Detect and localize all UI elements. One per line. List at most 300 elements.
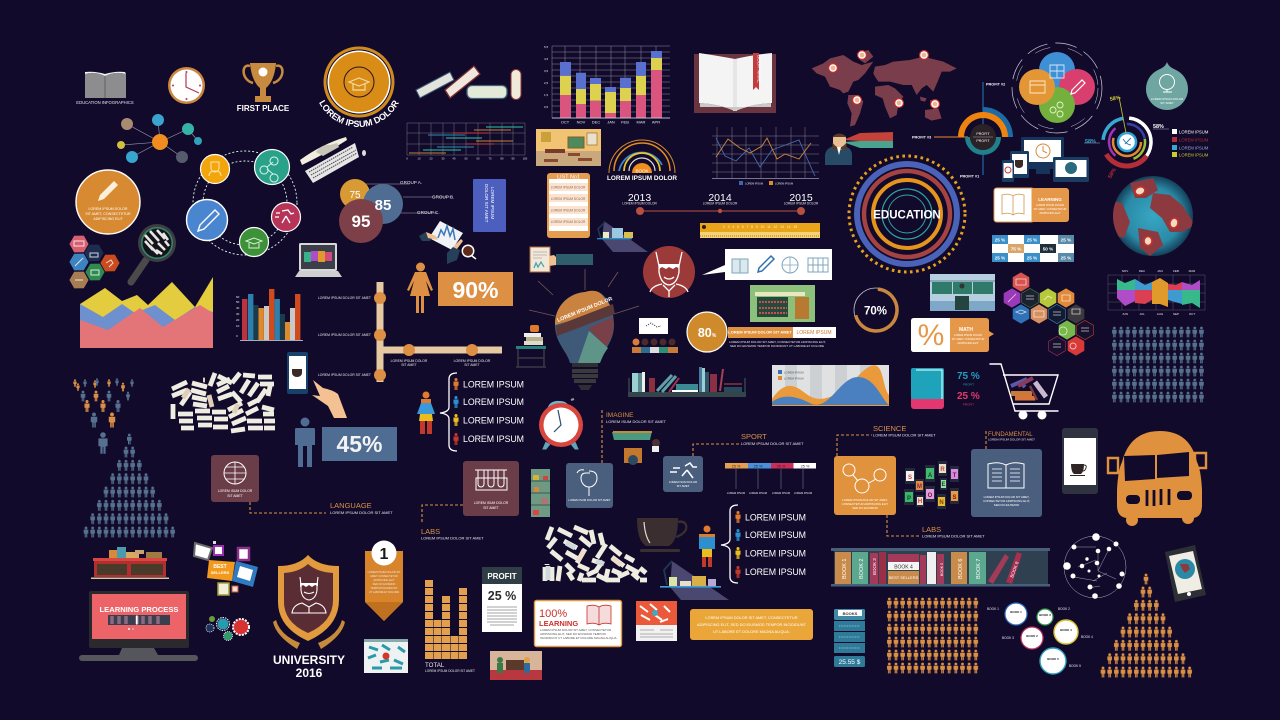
globe with pins	[1110, 176, 1195, 256]
large bookshelf: BOOK 1	[842, 559, 848, 579]
numbered banner: 1	[380, 546, 389, 563]
woman with colored bands and list one: LOREM IPSUM	[463, 397, 524, 407]
icon: students with presentation board	[632, 318, 678, 353]
stat: 80 percent circle with bar: LOREM IPSUM	[796, 330, 832, 336]
numbered banner: LOREM IPSUM DOLOR SIT	[368, 570, 401, 574]
icon: large open book: BOOK NAME	[756, 55, 762, 83]
large bookshelf: BOOK 5	[940, 563, 944, 576]
icon: grey open book with caption	[76, 72, 134, 105]
percent stacked bar: LOREM IPSUM	[794, 491, 812, 495]
100 percent learning card: 100%	[539, 608, 567, 620]
stat: 80 percent circle with bar: LOREM IPSUM DOLOR SIT AMET	[728, 330, 792, 334]
stream chart	[1108, 269, 1205, 316]
list card number one: LIST No1	[557, 174, 580, 180]
icon: ruler: 2 3 4 5 6 7 8 9 10 11 12 13 14 15	[723, 225, 797, 229]
timeline 2013 to 2015: 2014	[708, 192, 732, 204]
connector and label: labs right: LABS	[922, 525, 941, 534]
icon: phone with coffee and pointing hand	[287, 352, 347, 418]
smartphones letter tiles: S	[952, 495, 957, 501]
numbered banner	[365, 540, 403, 621]
line chart: LOREM IPSUM	[775, 182, 793, 186]
percent stacked bar: 25 %	[777, 464, 786, 468]
icon: magnifier over chalk	[131, 224, 176, 282]
large bookshelf: BOOK 2	[859, 559, 865, 579]
profit semi-circle chart: PROFIT #2	[986, 82, 1005, 86]
stream chart: JUN	[1122, 312, 1128, 316]
100 percent learning card: LEARNING	[539, 619, 578, 628]
stat: 70 percent ring	[853, 287, 899, 333]
woman with colored bands and list one: LOREM IPSUM	[463, 434, 524, 444]
connector and label: labs left: LABS	[421, 527, 440, 536]
list card number one	[547, 173, 590, 238]
stacked bar chart: MAR	[637, 120, 646, 124]
smartphones letter tiles	[904, 461, 959, 509]
icon: trophy first place	[237, 63, 290, 113]
book circles: BOOK 2	[1026, 634, 1038, 638]
tilted phone with globe	[1165, 545, 1206, 602]
book circles: BOOK 5	[1069, 664, 1081, 668]
subway style timeline: LOREM IPSUM DOLOR SIT AMET	[318, 333, 371, 337]
science card: CONSECTETUR ADIPISCING ELIT,	[842, 502, 889, 506]
connector and label: sport	[693, 432, 804, 456]
connector and label: science: LOREM IPSUM DOLOR SIT AMET	[873, 432, 936, 438]
stacked bar chart: JAN	[607, 120, 615, 124]
numbered banner: ADIPISCING ELIT	[373, 578, 395, 582]
phone with coffee	[1062, 428, 1098, 494]
smartphones letter tiles: O	[928, 493, 933, 499]
connector and label: sport: LOREM IPSUM DOLOR SIT AMET	[741, 441, 804, 446]
list card number one: LOREM IPSUM DOLOR	[551, 208, 586, 212]
best sellers book tiles	[194, 541, 258, 595]
area chart	[80, 277, 213, 348]
semi-circular arches with book: LOREM IPSUM DOLOR	[607, 175, 677, 182]
list card number one: LOREM IPSUM DOLOR	[551, 197, 586, 201]
stats: 75 and 25 percent profit: 75 %	[957, 371, 980, 382]
sport card: LOREM ISUM DOLOR	[669, 480, 697, 484]
monitor learning process: LEARNING PROCESS	[100, 605, 178, 614]
sport card: SIT AMET	[677, 484, 690, 488]
smartphones letter tiles: H	[918, 499, 922, 505]
fundamental card	[971, 449, 1042, 517]
icon: hand holding paper	[530, 247, 593, 272]
stacked bar chart: 2,5	[544, 81, 549, 85]
books price list: 25.55 $	[839, 659, 861, 666]
orange text box: LOREM IPSUM DOLOR SIT AMET, CONSECTETUR	[705, 615, 798, 620]
stat: 90 percent woman	[407, 262, 513, 313]
icon: bearded man with banner	[825, 132, 893, 165]
teal globe drop	[1146, 62, 1188, 110]
woman with colored bands and list one: LOREM IPSUM	[463, 380, 524, 390]
percent stacked bar: LOREM IPSUM	[772, 491, 790, 495]
university crest	[273, 555, 345, 680]
stats: 75 and 25 percent profit: PROFIT	[963, 382, 974, 386]
stacked bar chart: NOV	[577, 120, 586, 124]
teal globe drop: LOREM IPSUM DOLOR	[1151, 97, 1184, 101]
connector and label: fundamental: LOREM IPSUM DOLOR SIT AMET	[988, 438, 1035, 442]
large bookshelf: BOOK 8	[1009, 560, 1020, 578]
books price list: BOOKS	[843, 611, 858, 616]
percent table	[992, 235, 1074, 262]
stat: 80 percent circle with bar: SED DO EIUSMOD TEMPOR INCIDIDUNT UT LABORE ET DOLORE	[730, 344, 824, 348]
list card number one: LOREM IPSUM DOLOR	[551, 220, 586, 224]
smartphones letter tiles: P	[907, 496, 911, 502]
percent table: 25 %	[1061, 238, 1071, 242]
map screenshot	[364, 639, 408, 673]
smartphones letter tiles: S	[908, 475, 912, 481]
sport card	[663, 456, 703, 492]
block bar chart total: TOTAL	[425, 662, 445, 669]
alarm clock	[539, 399, 583, 449]
scene: students at table	[490, 651, 542, 680]
network of dots	[1063, 533, 1126, 599]
wave card: LOREM IPSUM	[784, 376, 804, 380]
monitor learning process	[79, 591, 198, 661]
connector and label: labs right	[887, 515, 985, 538]
large bookshelf: BOOK 6	[958, 559, 964, 579]
smartphones letter tiles: E	[941, 482, 946, 488]
bar chart: 10	[236, 324, 240, 328]
icon: keyboard and flat monitor	[300, 137, 366, 183]
blue book card: DOLOR SIT AMET	[484, 184, 489, 223]
icon: shopping cart with books	[990, 364, 1058, 420]
stacked bar chart: 0,5	[544, 105, 549, 109]
man with colored bands and list two: LOREM IPSUM	[745, 567, 806, 577]
gantt chart: 40	[453, 156, 456, 160]
best sellers book tiles: BEST	[213, 564, 227, 570]
gantt chart: 20	[430, 156, 433, 160]
numbered banner: UT LABORE ET DOLORE	[369, 590, 399, 594]
percent stacked bar: LOREM IPSUM	[749, 491, 767, 495]
science card: SED DO EIUSMOD	[852, 506, 878, 510]
stream chart: NOV	[1122, 269, 1128, 273]
connector and label: sport: SPORT	[741, 432, 767, 441]
stream chart: JUL	[1139, 312, 1145, 316]
stream chart: AUG	[1157, 312, 1164, 316]
learning card: ADIPISCING ELIT	[1039, 211, 1061, 215]
percent stacked bar: 25 %	[801, 464, 810, 468]
100 percent learning card: INCIDIDUNT UT LABORE ET DOLORE MAGNA ALIQUA.	[540, 636, 618, 640]
gantt chart: 90	[512, 156, 515, 160]
semi-circular arches with book	[607, 140, 677, 182]
bar chart: 40	[236, 306, 240, 310]
venn four circles with icons	[1012, 43, 1102, 133]
orange callout circle: ADIPISCING ELIT	[93, 217, 123, 221]
book circles: BOOK 3	[1039, 613, 1051, 617]
connector and label: language: LOREM IPSUM DOLOR SIT AMET	[330, 510, 393, 515]
science card	[834, 456, 896, 515]
funnel of people	[73, 378, 134, 454]
bar chart: 0	[236, 334, 238, 338]
books price list	[834, 609, 865, 667]
profit card: 25 %	[488, 589, 516, 603]
timeline 2013 to 2015: LOREM IPSUM DOLOR	[784, 202, 819, 206]
language card: SIT AMET	[227, 494, 243, 498]
scene: teacher at lectern	[930, 274, 995, 311]
stream chart: OCT	[1189, 312, 1195, 316]
connector and label: fundamental: FUNDAMENTAL	[988, 432, 1033, 438]
stream chart: DEC	[1139, 269, 1146, 273]
semi-circular arches with book: BOOK	[635, 168, 649, 174]
subway style timeline: LOREM IPSUM DOLOR SIT AMET	[318, 373, 371, 377]
connector and label: language: LANGUAGE	[330, 501, 372, 510]
hexagon honeycomb	[1004, 272, 1093, 356]
stream chart: MAR	[1189, 269, 1196, 273]
icon: grey open book with caption: EDUCATION INFOGRAPHICS	[76, 100, 134, 105]
stream chart: FEB	[1173, 269, 1179, 273]
subway style timeline: LOREM IPSUM DOLOR	[454, 359, 491, 363]
math card	[911, 318, 994, 352]
block bar chart total: LOREM IPSUM DOLOR SIT AMET	[425, 669, 475, 673]
gantt chart: 50	[465, 156, 468, 160]
overlapping score circles with group labels: GROUP B.	[432, 194, 454, 200]
stat: 80 percent circle with bar: 80%	[698, 326, 717, 340]
icon: shelf cabinet	[531, 469, 550, 517]
percent table: 25 %	[1061, 256, 1071, 260]
cycle diagram with five icons	[186, 150, 300, 256]
math card: %	[918, 319, 944, 352]
stats: 75 and 25 percent profit: 25 %	[957, 391, 980, 402]
best sellers book tiles: SELLERS	[211, 570, 230, 575]
chalk pile one	[172, 373, 275, 431]
blue book card: LOREM IPSUM	[490, 187, 495, 219]
large bookshelf: BOOK 7	[976, 559, 982, 579]
orange text box	[690, 609, 813, 640]
idea lightbulb segmented: LOREM IPSUM DOLOR	[557, 296, 614, 324]
university crest: UNIVERSITY	[273, 653, 345, 667]
book circles: BOOK 3	[1002, 636, 1014, 640]
orange text box: ADIPISCING ELIT, SED DO EIUSMOD TEMPOR INCIDIDUNT	[697, 622, 807, 627]
language card	[211, 455, 259, 502]
labs card	[463, 461, 519, 516]
scene: desk from above	[612, 431, 660, 465]
connector and label: labs left: LOREM IPSUM DOLOR SIT AMET	[421, 536, 484, 540]
man with colored bands and list two: LOREM IPSUM	[745, 548, 806, 558]
numbered banner: TEMPOR INCIDIDUNT	[371, 586, 398, 590]
numbered banner: SED DO EIUSMOD	[373, 582, 396, 586]
stacked bar chart: 1,5	[544, 93, 549, 97]
stacked bar chart	[544, 45, 670, 124]
stat: 80 percent circle with bar	[687, 312, 836, 352]
percent table: 75 %	[1011, 246, 1021, 252]
stacked bar chart: APR	[652, 120, 660, 124]
icon: devices	[1002, 137, 1089, 182]
overlapping score circles with group labels: GROUP A.	[400, 180, 422, 185]
line chart: LOREM IPSUM	[745, 182, 763, 186]
percent stacked bar: 25 %	[754, 464, 763, 468]
gantt chart	[406, 123, 528, 160]
badge: graduation seal with curved text	[319, 46, 399, 127]
timeline 2013 to 2015: 2015	[789, 192, 813, 204]
imagine card	[566, 463, 613, 508]
profit semi-circle chart: PROFIT #1	[960, 174, 979, 178]
connector and label: imagine	[602, 410, 666, 463]
connector and label: fundamental	[986, 429, 1035, 449]
blue book card	[473, 179, 506, 232]
percent table: 25 %	[1027, 238, 1037, 242]
percent table: 25 %	[995, 238, 1005, 242]
profit semi-circle chart: PROFIT	[976, 132, 990, 136]
hexagon cluster	[67, 232, 122, 292]
badge: graduation seal with curved text: LOREM IPSUM DOLOR	[319, 100, 399, 127]
icon: hands over tablet and coffee	[419, 221, 476, 264]
connector and label: imagine: LOREM ISUM DOLOR SIT AMET	[606, 419, 666, 424]
smartphones letter tiles: R	[940, 467, 945, 473]
large bookshelf: BEST SELLERS	[889, 575, 919, 580]
stacked bar chart: DEC	[592, 120, 600, 124]
subway style timeline: LOREM IPSUM DOLOR	[391, 359, 428, 363]
stream chart: SEP	[1173, 312, 1179, 316]
percent stacked bar: LOREM IPSUM	[727, 491, 745, 495]
labs card: SIT AMET	[483, 506, 499, 510]
smartphones letter tiles: M	[917, 484, 922, 490]
stacked bar chart: 5,5	[544, 45, 549, 49]
orange callout circle: LOREM IPSUM DOLOR	[89, 207, 128, 211]
radial progress chart with legend: 58%	[1085, 139, 1096, 145]
percent table: 25 %	[995, 256, 1005, 260]
gantt chart: 70	[489, 156, 492, 160]
connector and label: science	[837, 424, 936, 456]
100 percent learning card: ADIPISCING ELIT, SED DO EIUSMOD TEMPOR	[540, 632, 607, 636]
orange callout circle: SIT AMET, CONSECTETUR	[85, 212, 131, 216]
people pyramid orange	[1100, 574, 1193, 679]
smartphones letter tiles: N	[939, 500, 944, 506]
man with colored bands and list two: LOREM IPSUM	[745, 530, 806, 540]
bar chart: 50	[236, 300, 240, 304]
timeline 2013 to 2015: LOREM IPSUM DOLOR	[622, 202, 657, 206]
icon: trophy first place: FIRST PLACE	[237, 104, 290, 113]
gantt chart: 30	[442, 156, 445, 160]
book circles: BOOK 1	[987, 607, 999, 611]
teal globe drop: SIT AMET	[1160, 101, 1174, 105]
numbered banner: AMET CONSECTETUR	[370, 574, 398, 578]
radial progress chart with legend: LOREM IPSUM	[1179, 152, 1209, 158]
icon: books row	[416, 66, 521, 100]
learning card	[994, 188, 1069, 222]
stacked bar chart: 3,5	[544, 69, 549, 73]
icon: large open book	[694, 53, 776, 113]
percent stacked bar	[725, 463, 816, 495]
overlapping score circles with group labels: 75	[349, 190, 361, 201]
profit semi-circle chart: PROFIT #3	[912, 136, 931, 140]
icon: lamp on small shelf	[660, 561, 729, 600]
connector and label: labs left	[421, 505, 484, 540]
math card: SIT AMET, CONSECTETUR	[952, 337, 984, 341]
100 percent learning card: LOREM IPSUM DOLOR SIT AMET, CONSECTETUR	[540, 628, 612, 632]
block bar chart total	[425, 580, 475, 673]
radial progress chart with legend: 58%	[1153, 124, 1164, 130]
gantt chart: 100	[523, 156, 528, 160]
icon: gears	[206, 616, 249, 640]
book circles	[987, 603, 1093, 674]
world map with pins	[812, 50, 957, 127]
stat: 80 percent circle with bar: LOREM IPSUM DOLOR SIT AMET, CONSECTETUR ADIPISCING ELIT,	[729, 340, 826, 344]
orange callout circle	[76, 170, 140, 234]
icon: desk lamp with books	[597, 221, 648, 252]
people grid orange	[886, 596, 979, 674]
percent table: 25 %	[1027, 256, 1037, 260]
book circles: BOOK 1	[1010, 610, 1022, 614]
profit semi-circle chart: PROFIT	[976, 139, 990, 143]
red chalk article	[636, 601, 677, 641]
idea lightbulb segmented	[529, 269, 639, 390]
icon: stacked books on table	[516, 325, 546, 367]
wave card: LOREM IPSUM	[784, 370, 804, 374]
percent table: 50 %	[1043, 246, 1053, 252]
stats: 75 and 25 percent profit: PROFIT	[963, 402, 974, 406]
learning card: LEARNING	[1038, 197, 1062, 202]
bar chart: 30	[236, 312, 240, 316]
subway style timeline: SIT AMET	[401, 363, 417, 367]
book circles: BOOK 4	[1060, 628, 1072, 632]
connector and label: science: SCIENCE	[873, 424, 906, 433]
orange text box: UT LABORE ET DOLORE MAGNA ALIQUA.	[713, 629, 790, 634]
radial progress chart with legend	[1084, 95, 1209, 180]
teacher portrait circle	[643, 246, 695, 298]
stat: 70 percent ring: 70%	[864, 306, 887, 318]
radial progress chart with legend: LOREM IPSUM	[1179, 130, 1209, 134]
bar chart: 20	[236, 318, 240, 322]
profit semi-circle chart	[912, 82, 1013, 178]
radial progress chart with legend: 58%	[1107, 167, 1118, 180]
science card: LOREM IPSUM DOLOR SIT AMET,	[842, 498, 888, 502]
learning card: LOREM IPSUM DOLOR	[1036, 203, 1064, 207]
stats: 75 and 25 percent profit	[957, 371, 980, 406]
school bus	[1108, 431, 1206, 526]
speech bubble with icons	[702, 249, 832, 280]
icon: ruler	[700, 223, 820, 238]
smartphones letter tiles: A	[928, 473, 933, 479]
overlapping score circles with group labels	[339, 179, 454, 243]
gantt chart: 80	[501, 156, 504, 160]
small bookshelf	[628, 367, 746, 397]
stacked bar chart: OCT	[561, 120, 570, 124]
large bookshelf: BOOK 3	[872, 558, 877, 575]
connector and label: imagine: IMAGINE	[606, 412, 634, 419]
labs card: LOREM ISUM DOLOR	[474, 501, 509, 505]
smartphones letter tiles: T	[953, 473, 957, 479]
imagine card: LOREM ISUM DOLOR SIT AMET	[569, 498, 611, 502]
fundamental card: SED DO EIUSMOD	[994, 503, 1019, 507]
man with colored bands and list two	[699, 505, 806, 583]
radial progress chart with legend: 58%	[1109, 95, 1121, 103]
profit card: PROFIT	[487, 572, 517, 581]
stream chart: JAN	[1157, 269, 1163, 273]
timeline 2013 to 2015: LOREM IPSUM DOLOR	[703, 202, 738, 206]
gantt chart: 0	[406, 156, 408, 160]
line chart	[712, 127, 819, 186]
subway style timeline: LOREM IPSUM DOLOR SIT AMET	[318, 296, 371, 300]
bar chart: 60	[236, 295, 240, 299]
woman with colored bands and list one: LOREM IPSUM	[463, 416, 524, 426]
man with colored bands and list two: LOREM IPSUM	[745, 512, 806, 522]
connector and label: language	[250, 501, 393, 515]
gantt chart: 10	[418, 156, 421, 160]
subway style timeline	[318, 282, 502, 382]
language card: LOREM ISUM DOLOR	[218, 489, 253, 493]
fundamental card: CONSECTETUR ADIPISCING ELIT,	[983, 499, 1030, 503]
math card: LOREM IPSUM DOLOR	[954, 333, 982, 337]
book circles: BOOK 4	[1081, 635, 1093, 639]
people grid blue	[1111, 326, 1205, 404]
gantt chart: 60	[477, 156, 480, 160]
math card: MATH	[959, 327, 973, 333]
stacked bar chart: 4,5	[544, 57, 549, 61]
learning card: SIT AMET, CONSECTETUR	[1034, 207, 1066, 211]
stat: 45 percent man: 45%	[336, 431, 383, 457]
timeline 2013 to 2015: 2013	[628, 192, 651, 204]
overlapping score circles with group labels: 85	[375, 197, 391, 214]
chalk pile two	[545, 527, 647, 581]
